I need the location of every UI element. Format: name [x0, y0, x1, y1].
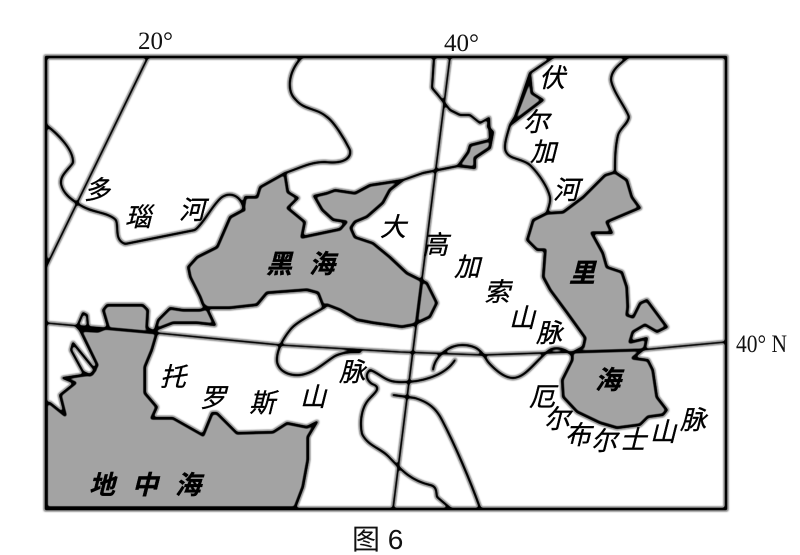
label: Greater Caucasus [380, 212, 565, 348]
island: Italy tip [77, 313, 88, 330]
river: Kura [433, 345, 572, 378]
river: Danube [46, 125, 244, 244]
label: 40 degrees: 40° [444, 30, 479, 57]
sea: Caspian [527, 172, 667, 428]
label: Volga: 伏 [539, 63, 568, 93]
river: Tigris [393, 395, 480, 508]
label: Danube [84, 175, 210, 232]
label: Caspian Sea: 里 [569, 258, 597, 288]
label: Volga: 加 [530, 137, 559, 167]
label: Elburz Mountains [529, 382, 709, 456]
river: Volga west bank [505, 58, 552, 213]
label: Taurus Mountains: 山 [300, 382, 328, 412]
river: Aras branch [370, 360, 455, 382]
label: Danube: 河 [179, 195, 210, 225]
label: Caspian Sea: 海 [595, 365, 625, 395]
label: Volga: 河 [553, 175, 584, 205]
river: Euphrates [361, 370, 450, 508]
label: Mediterranean Sea: 海 [175, 470, 205, 500]
meridian 40 [393, 57, 450, 509]
river: Volga east branch [611, 58, 629, 172]
sea: Marmara [155, 308, 215, 330]
river: Don [403, 58, 493, 180]
reservoir: Volga [510, 73, 543, 125]
river: Turkish north [277, 307, 360, 375]
label: Black Sea [266, 249, 339, 279]
label: 20 degrees: 20° [138, 28, 173, 55]
label: Elburz Mountains: 厄 [529, 382, 559, 412]
label: Black Sea: 海 [309, 249, 339, 279]
label: Volga: 尔 [523, 107, 552, 137]
caption: 图 6 [352, 524, 403, 555]
meridian 20 [46, 57, 148, 267]
label: Caspian Sea [569, 258, 625, 395]
label: Greater Caucasus: 高 [422, 230, 452, 260]
label: Taurus Mountains: 脉 [339, 357, 368, 387]
label: Volga [523, 63, 584, 205]
label: 40 N: 40° N [736, 331, 787, 358]
label: Elburz Mountains: 山 [650, 417, 678, 447]
island: Greek peninsula [71, 343, 95, 375]
label: Danube: 瑙 [125, 202, 155, 232]
label: Elburz Mountains: 尔 [591, 426, 620, 456]
label: Danube: 多 [84, 175, 111, 205]
label: Taurus Mountains [160, 357, 368, 418]
label: Greater Caucasus: 脉 [536, 318, 565, 348]
river: Dnieper [285, 58, 350, 173]
label: Elburz Mountains: 脉 [680, 405, 709, 435]
sea: Mediterranean [46, 305, 317, 508]
label: Greater Caucasus: 山 [509, 303, 537, 333]
label: Taurus Mountains: 斯 [249, 388, 279, 418]
reservoir: Don [458, 118, 493, 168]
label: Mediterranean Sea [89, 470, 205, 500]
map frame [46, 57, 726, 509]
label: Elburz Mountains: 尔 [544, 404, 573, 434]
label: Greater Caucasus: 索 [484, 277, 513, 307]
label: Elburz Mountains: 士 [620, 425, 649, 455]
sea: Black Sea and Azov [188, 173, 437, 327]
label: Mediterranean Sea: 中 [132, 470, 161, 500]
parallel 40N [46, 323, 726, 355]
label: Taurus Mountains: 罗 [200, 383, 229, 413]
label: Black Sea: 黑 [266, 249, 294, 279]
label: Greater Caucasus: 大 [380, 212, 409, 242]
label: Taurus Mountains: 托 [160, 362, 189, 392]
label: Greater Caucasus: 加 [454, 252, 483, 282]
label: Elburz Mountains: 布 [565, 420, 594, 450]
label: Mediterranean Sea: 地 [89, 470, 118, 500]
